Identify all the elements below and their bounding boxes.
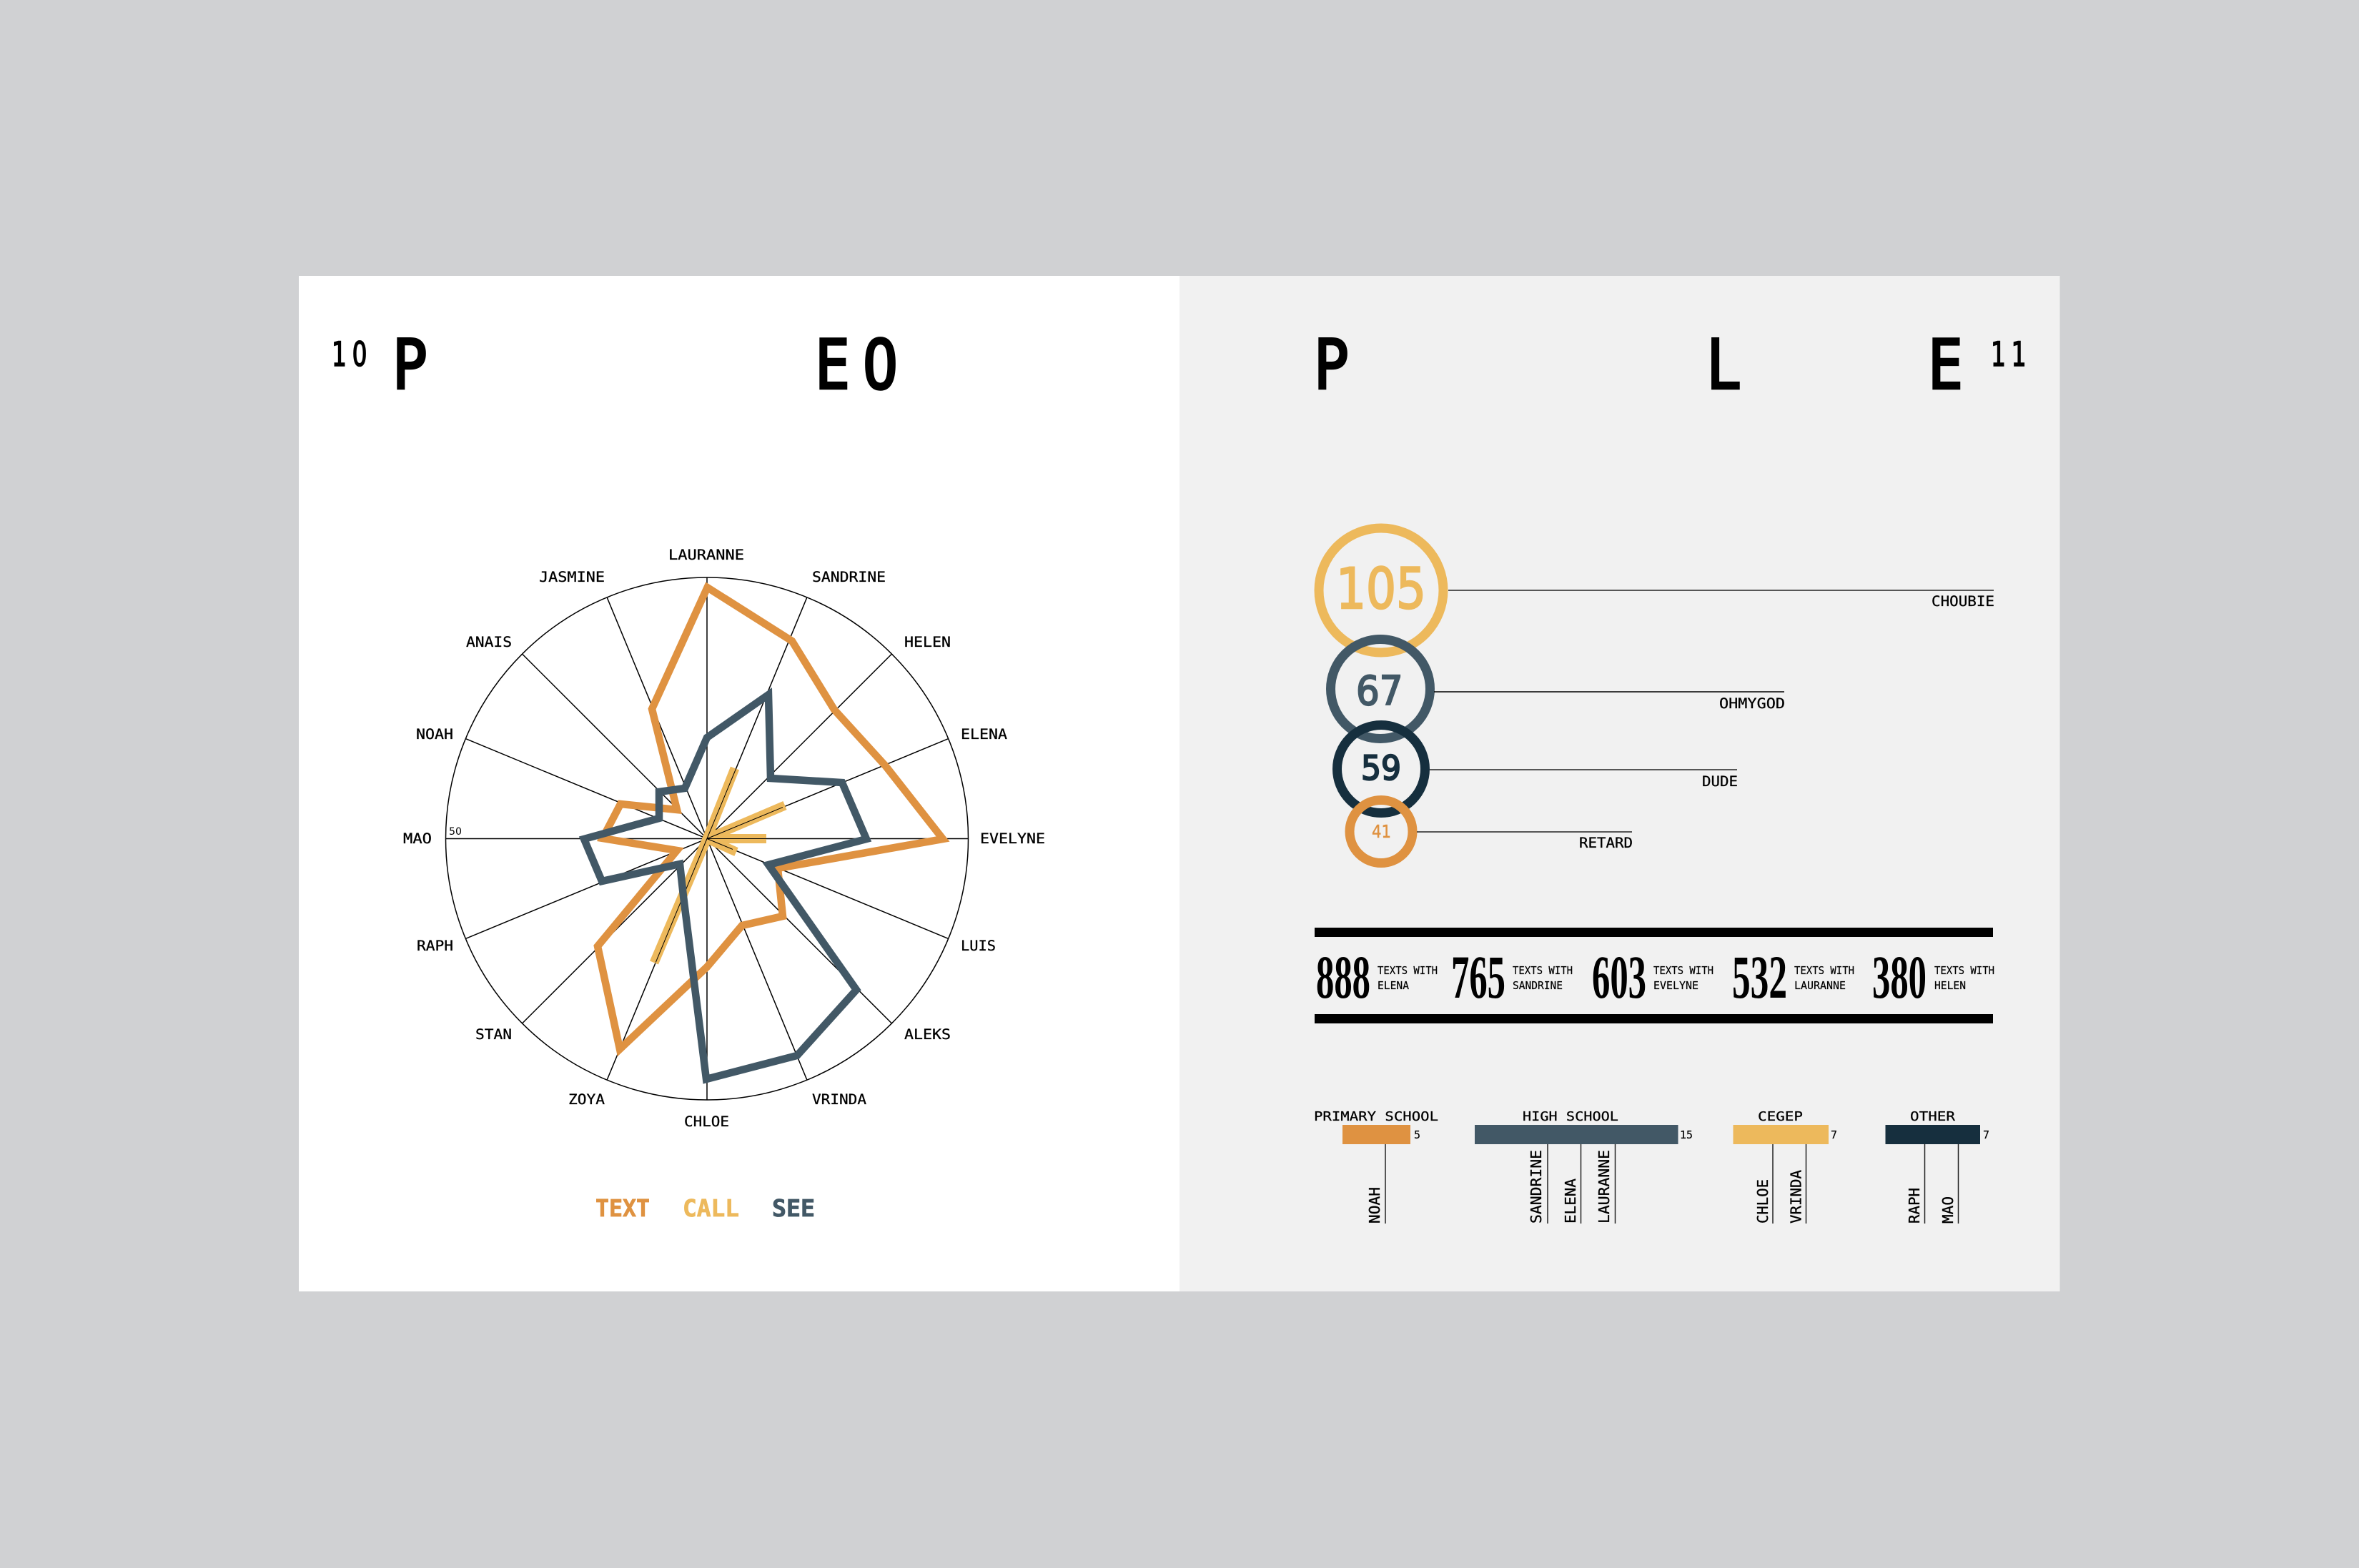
spoke lines over call series [656, 768, 783, 962]
group: primary school: 5 [1414, 1128, 1420, 1141]
spoke labels: JASMINE [539, 569, 605, 585]
stat: 532 lauranne: TEXTS WITH [1794, 964, 1854, 977]
group: high school: HIGH SCHOOL [1523, 1109, 1618, 1124]
group: other: MAO [1939, 1196, 1957, 1224]
group: primary school: NOAH [1366, 1187, 1383, 1224]
bubble: retard 41: RETARD [1579, 835, 1633, 851]
group: cegep: VRINDA [1787, 1170, 1804, 1224]
series: text (orange) [598, 587, 943, 1049]
spoke labels: LAURANNE [668, 547, 744, 563]
group: other [1886, 1109, 1989, 1224]
group: cegep [1733, 1109, 1837, 1224]
heading letters: P E O [392, 326, 898, 405]
top texts row [1316, 943, 1994, 1011]
bubble: choubie 105: CHOUBIE [1932, 593, 1994, 610]
series: see (blue) [584, 695, 866, 1079]
group: other: RAPH [1906, 1188, 1923, 1224]
group: cegep: CEGEP [1758, 1109, 1803, 1124]
bubble: dude 59: DUDE [1702, 773, 1738, 790]
bubble: retard 41 [1350, 800, 1633, 863]
stat: 765 sandrine: 765 [1451, 943, 1505, 1011]
series: call (yellow) [654, 768, 785, 963]
heading letters: P E O: E [815, 326, 850, 405]
stat: 380 helen: TEXTS WITH [1934, 964, 1994, 977]
spoke labels: ZOYA [568, 1091, 605, 1108]
heading letters: P L E: P [1314, 326, 1349, 405]
top rule [1315, 928, 1993, 937]
spoke labels: ANAIS [466, 634, 512, 650]
stat: 380 helen: 380 [1872, 943, 1927, 1011]
spoke labels [403, 547, 1045, 1130]
spoke labels: SANDRINE [812, 569, 886, 585]
stat: 380 helen: HELEN [1934, 979, 1966, 992]
scale label 50: 50 [449, 826, 462, 838]
group: high school: 15 [1680, 1128, 1693, 1141]
heading letters: P E O: O [863, 326, 898, 405]
legend: CALL [683, 1194, 739, 1222]
stat: 888 elena: ELENA [1378, 979, 1409, 992]
spoke labels: MAO [403, 830, 432, 847]
group: primary school: PRIMARY SCHOOL [1314, 1109, 1438, 1124]
spoke labels: ALEKS [904, 1026, 951, 1043]
stat: 532 lauranne: 532 [1732, 943, 1787, 1011]
stat: 765 sandrine: SANDRINE [1513, 979, 1563, 992]
bubble: dude 59: 59 [1361, 749, 1401, 788]
spoke labels: NOAH [416, 726, 453, 743]
heading letters: P E O: P [392, 326, 427, 405]
heading letters: P L E: E [1928, 326, 1963, 405]
bubble: ohmygod 67: 67 [1356, 668, 1403, 715]
spoke labels: RAPH [417, 938, 453, 954]
group: cegep: 7 [1831, 1128, 1837, 1141]
spoke labels: EVELYNE [980, 830, 1045, 847]
stat: 765 sandrine: TEXTS WITH [1513, 964, 1573, 977]
page number 11: 11 [1991, 334, 2032, 374]
bubble chart: word counts [1319, 528, 1994, 863]
legend [595, 1194, 815, 1222]
bubble: choubie 105 [1319, 528, 1994, 652]
bubble: dude 59 [1337, 725, 1738, 813]
bottom rule [1315, 1014, 1993, 1023]
bubble: retard 41: 41 [1372, 821, 1391, 842]
panel: right page [1180, 276, 2060, 1291]
group: high school: LAURANNE [1596, 1150, 1613, 1224]
stat: 532 lauranne: LAURANNE [1794, 979, 1846, 992]
heading letters: P L E [1314, 326, 1963, 405]
spoke labels: STAN [475, 1026, 512, 1043]
group: cegep: CHLOE [1754, 1179, 1771, 1224]
bubble: ohmygod 67 [1331, 639, 1785, 739]
group: primary school [1314, 1109, 1438, 1224]
bubble: ohmygod 67: OHMYGOD [1719, 695, 1785, 712]
heading letters: P L E: L [1706, 326, 1741, 405]
group: other: OTHER [1910, 1109, 1955, 1124]
group: other: 7 [1983, 1128, 1989, 1141]
stat: 603 evelyne: TEXTS WITH [1653, 964, 1713, 977]
group: high school: SANDRINE [1528, 1150, 1545, 1224]
stat: 888 elena: TEXTS WITH [1378, 964, 1438, 977]
legend: SEE [772, 1194, 815, 1222]
legend: TEXT [595, 1194, 650, 1222]
spoke labels: HELEN [904, 634, 951, 650]
radar chart [403, 547, 1045, 1130]
stat: 888 elena: 888 [1316, 943, 1370, 1011]
spoke labels: CHLOE [684, 1113, 729, 1130]
stat: 603 evelyne: 603 [1592, 943, 1646, 1011]
spoke labels: VRINDA [812, 1091, 866, 1108]
stat: 603 evelyne: EVELYNE [1653, 979, 1698, 992]
group: high school [1475, 1109, 1693, 1224]
group: high school: ELENA [1562, 1179, 1579, 1224]
bubble: choubie 105: 105 [1336, 557, 1426, 622]
education bar chart [1314, 1109, 1989, 1224]
spoke labels: LUIS [961, 938, 996, 954]
panel: left page [299, 276, 1180, 1291]
page number 10: 10 [332, 334, 372, 374]
chart grid: circle and spokes [446, 577, 968, 1100]
spoke labels: ELENA [961, 726, 1007, 743]
